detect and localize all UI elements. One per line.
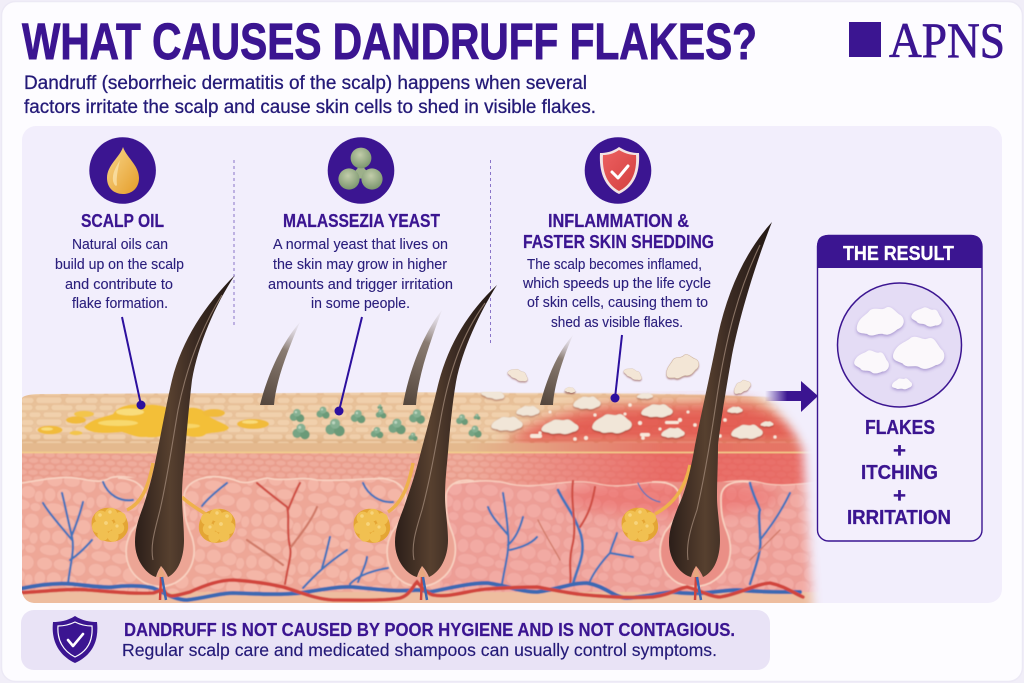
icon: yeast cells xyxy=(328,137,394,204)
follicle sheath 1 xyxy=(118,477,212,586)
leader line: yeast xyxy=(334,317,362,416)
heading: inflammation and faster skin shedding: INFLAMMATION & xyxy=(548,211,689,231)
arrow to result xyxy=(765,381,818,412)
result header: THE RESULT xyxy=(843,242,954,265)
epidermis inflamed overlay xyxy=(488,452,810,486)
sebaceous glands xyxy=(92,463,690,543)
callout: hygiene note xyxy=(21,610,770,670)
logo: APNS xyxy=(849,12,1005,68)
text: scalp oil description: build up on the scalp xyxy=(55,257,184,273)
inflamed surface red area xyxy=(505,402,815,445)
intro text: Dandruff (seborrheic dermatitis of the scalp) happens when several xyxy=(24,73,587,94)
leader line: scalp oil xyxy=(122,317,146,410)
result list: + xyxy=(893,439,906,462)
main panel background xyxy=(22,126,1002,603)
text: inflammation description: of skin cells, causing them to xyxy=(527,295,708,311)
icon: red shield xyxy=(585,137,651,204)
column divider 2 xyxy=(490,160,492,343)
dermis inflammation glow xyxy=(560,479,780,515)
text: scalp oil description: and contribute to xyxy=(65,277,173,293)
leader line: inflammation xyxy=(610,335,622,402)
result circle with flakes xyxy=(838,283,962,407)
white flakes on skin xyxy=(481,387,773,439)
blue vessel trees xyxy=(43,482,790,588)
text: yeast description: the skin may grow in higher xyxy=(273,257,447,273)
text: yeast description: in some people. xyxy=(311,296,410,312)
yellow boundary line xyxy=(0,452,860,454)
heading: malassezia yeast: MALASSEZIA YEAST xyxy=(283,211,440,231)
result header xyxy=(817,235,982,268)
result list xyxy=(847,416,951,529)
dermis pink tint xyxy=(440,482,808,592)
column 2: malassezia yeast xyxy=(268,137,453,312)
airborne flakes xyxy=(506,351,753,396)
panel: the result xyxy=(817,235,982,541)
hair 2 xyxy=(395,285,497,600)
icon: purple shield xyxy=(53,616,97,663)
text: yeast description: amounts and trigger irritation xyxy=(268,277,453,293)
result list: + xyxy=(893,484,906,507)
text: inflammation description: which speeds up the life cycle xyxy=(522,276,711,292)
heading: scalp oil: SCALP OIL xyxy=(81,211,164,231)
heading: inflammation and faster skin shedding: FASTER SKIN SHEDDING xyxy=(523,232,714,252)
hair 3 xyxy=(669,222,772,600)
callout heading: DANDRUFF IS NOT CAUSED BY POOR HYGIENE AND IS NOT CONTAGIOUS. xyxy=(124,620,735,640)
result list: FLAKES xyxy=(865,416,935,439)
skin cross-section illustration xyxy=(0,222,860,610)
intro text xyxy=(24,73,596,118)
surface lip band xyxy=(0,443,860,452)
red vessel trees xyxy=(247,481,780,584)
heading: inflammation and faster skin shedding xyxy=(523,211,714,252)
result list: IRRITATION xyxy=(847,506,951,529)
column 3: inflammation xyxy=(522,137,714,331)
lip band inflamed xyxy=(470,443,860,452)
text: inflammation description xyxy=(522,257,711,331)
logo: APNS: APNS xyxy=(889,12,1005,68)
intro text: factors irritate the scalp and cause skin cells to shed in visible flakes. xyxy=(24,97,596,118)
follicle sheath 2 xyxy=(378,478,474,586)
column divider 1 xyxy=(233,160,235,327)
icon: oil drop xyxy=(89,137,156,204)
result list: ITCHING xyxy=(861,461,938,484)
surface layer of scalp xyxy=(22,392,804,444)
title: WHAT CAUSES DANDRUFF FLAKES? xyxy=(22,13,757,70)
text: inflammation description: The scalp becomes inflamed, xyxy=(527,257,702,273)
surface cell texture xyxy=(0,392,860,443)
blood vessel base strip xyxy=(22,592,814,603)
callout text: Regular scalp care and medicated shampoos can usually control symptoms. xyxy=(122,640,717,660)
follicle sheath 3 xyxy=(652,482,749,586)
text: yeast description xyxy=(268,237,453,312)
text: yeast description: A normal yeast that lives on xyxy=(273,237,448,253)
text: scalp oil description xyxy=(55,237,184,312)
yeast clusters xyxy=(290,404,482,441)
text: scalp oil description: Natural oils can xyxy=(72,237,168,253)
bottom blue vessels xyxy=(15,583,800,600)
text: scalp oil description: flake formation. xyxy=(72,296,168,312)
hair 1 xyxy=(135,275,235,600)
dermis xyxy=(22,476,818,593)
oil puddle xyxy=(38,404,269,437)
small hairs xyxy=(260,310,573,405)
skin layers xyxy=(22,391,819,603)
epidermis band xyxy=(22,453,807,487)
column 1: scalp oil xyxy=(55,137,184,312)
bottom red vessels xyxy=(15,580,803,600)
text: inflammation description: shed as visible flakes. xyxy=(551,315,683,331)
small white skin bits on inflamed area xyxy=(530,403,777,441)
